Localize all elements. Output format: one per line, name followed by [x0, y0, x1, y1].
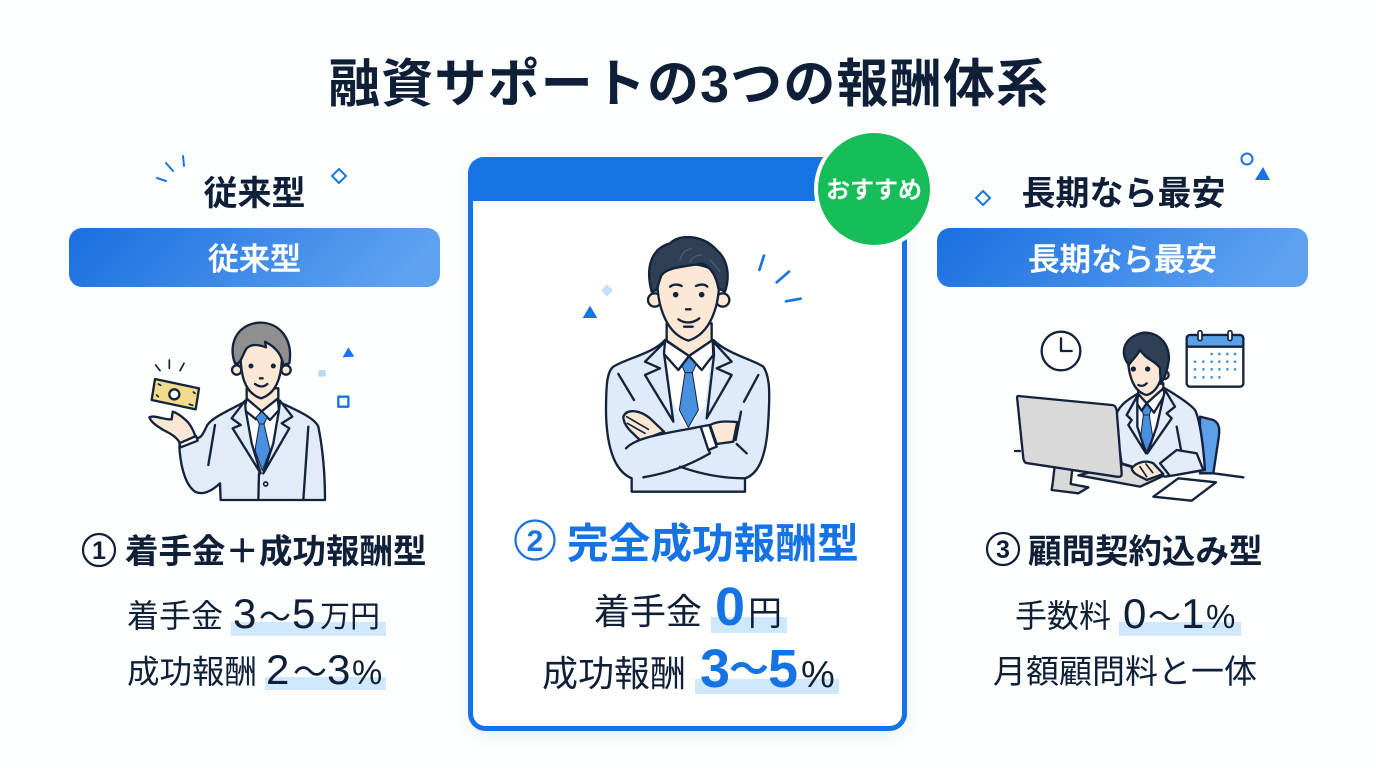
banner: right: 長期なら最安 — [1028, 241, 1217, 277]
card body — [470, 160, 904, 728]
panel: right plan — [937, 154, 1308, 690]
plan name: left: 着手金＋成功報酬型 — [125, 534, 426, 571]
icon: left sparkle decoration — [157, 156, 346, 183]
fee line: retainer: 万円 — [320, 601, 380, 634]
fee line: retainer: 〜 — [259, 599, 291, 635]
fee line: commission: % — [1206, 598, 1235, 635]
fee line: retainer zero: 0 — [715, 577, 745, 637]
fee line: commission: 0 — [1123, 590, 1146, 637]
fee line: success fee: 成功報酬 — [127, 654, 257, 690]
fee line: retainer: 5 — [292, 590, 315, 637]
banner: left: 従来型 — [208, 242, 301, 277]
fee line: commission: 〜 — [1148, 598, 1181, 635]
illustration: businessman at computer with clock and calendar — [1015, 331, 1243, 501]
fee line: success fee: 2 — [266, 646, 289, 693]
fee line: retainer zero: 円 — [748, 595, 782, 633]
icon: right shapes decoration — [976, 154, 1270, 205]
fee line: retainer zero — [594, 577, 787, 637]
fee line: retainer zero: 着手金 — [594, 591, 702, 632]
plan name: center: 完全成功報酬型 — [567, 520, 859, 567]
fee line: success fee: 5 — [768, 639, 798, 699]
fee line: success fee — [542, 639, 839, 699]
plan name: right: 顧問契約込み型 — [1028, 534, 1262, 571]
illustration: businessman with arms crossed — [583, 237, 801, 492]
fee line: retainer — [127, 590, 386, 637]
fee line: retainer: 3 — [233, 590, 256, 637]
plan name: right: 3 — [996, 536, 1010, 564]
fee line: success fee — [127, 646, 386, 693]
fee line: success fee: 成功報酬 — [542, 653, 686, 694]
title: 融資サポートの3つの報酬体系 — [328, 56, 1048, 114]
fee line: retainer: 着手金 — [127, 598, 223, 634]
panel: recommended center plan — [468, 129, 934, 731]
plan name: center: 2 — [527, 525, 543, 558]
badge: recommended — [814, 129, 934, 249]
fee line: monthly advisory: 月額顧問料と一体 — [993, 653, 1257, 690]
fee line: success fee: 〜 — [293, 654, 327, 692]
fee line: success fee: % — [801, 654, 835, 696]
panel: left plan — [69, 156, 440, 693]
heading: left label: 従来型 — [204, 175, 306, 213]
fee line: success fee: 3 — [327, 646, 350, 693]
banner: left — [69, 228, 440, 287]
heading: right label: 長期なら最安 — [1022, 175, 1226, 213]
banner: right — [937, 228, 1308, 287]
card header bar — [468, 157, 907, 201]
fee line: commission: 1 — [1181, 590, 1204, 637]
badge: recommended: おすすめ — [826, 177, 922, 204]
illustration: businessman holding money — [149, 323, 354, 500]
fee line: commission: 手数料 — [1015, 598, 1111, 634]
plan name: left: 1 — [92, 537, 106, 565]
fee line: success fee: % — [352, 654, 382, 692]
fee line: success fee: 3 — [700, 639, 730, 699]
fee line: success fee: 〜 — [729, 648, 769, 692]
fee line: commission — [1015, 590, 1241, 637]
